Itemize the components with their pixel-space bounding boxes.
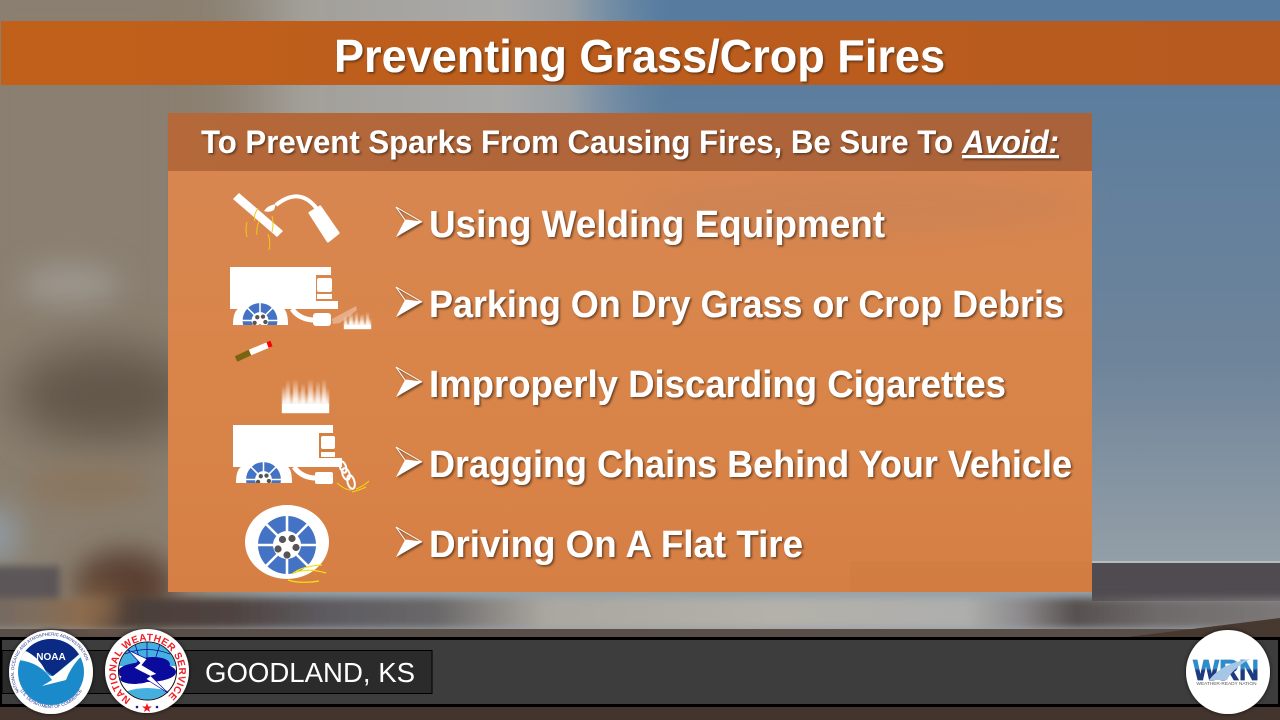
icon: dry grass [282, 379, 329, 413]
logo: Weather-Ready Nation [1186, 630, 1270, 714]
list item: welding: Using Welding Equipment [429, 204, 885, 246]
logo: NOAA: NATIONAL OCEANIC AND ATMOSPHERIC ADMINISTRATION [11, 632, 89, 694]
location label: GOODLAND, KS [205, 657, 415, 688]
icon: truck dragging chains [233, 425, 369, 498]
logo: Weather-Ready Nation: WRN [1193, 655, 1259, 687]
panel: avoid list [168, 113, 1092, 592]
title: Preventing Grass/Crop Fires [334, 30, 945, 82]
logo: NOAA: U.S. DEPARTMENT OF COMMERCE [20, 689, 82, 708]
logo: NOAA [8, 627, 94, 716]
panel heading: To Prevent Sparks From Causing Fires, Be Sure To [201, 124, 953, 160]
logo: NOAA: NOAA [36, 652, 66, 663]
icon: cigarette [236, 344, 272, 359]
icon: welding equipment [233, 193, 338, 250]
icon: truck parked on dry grass [230, 267, 372, 330]
list item: chains: Dragging Chains Behind Your Vehicle [429, 444, 1072, 486]
list item: parking: Parking On Dry Grass or Crop Debris [429, 284, 1064, 326]
list item: cigarettes: Improperly Discarding Cigarettes [429, 364, 1006, 406]
title banner [1, 21, 1280, 85]
logo: Weather-Ready Nation: WEATHER-READY NATION [1196, 681, 1256, 686]
footer bar [0, 637, 1280, 707]
icon: flat tire [245, 505, 329, 582]
panel heading: Avoid: [961, 124, 1059, 160]
list item: flat tire: Driving On A Flat Tire [429, 524, 803, 566]
location label [2, 650, 432, 694]
logo: National Weather Service: NATIONAL WEATHER SERVICE [109, 634, 186, 704]
panel heading [168, 113, 1092, 171]
